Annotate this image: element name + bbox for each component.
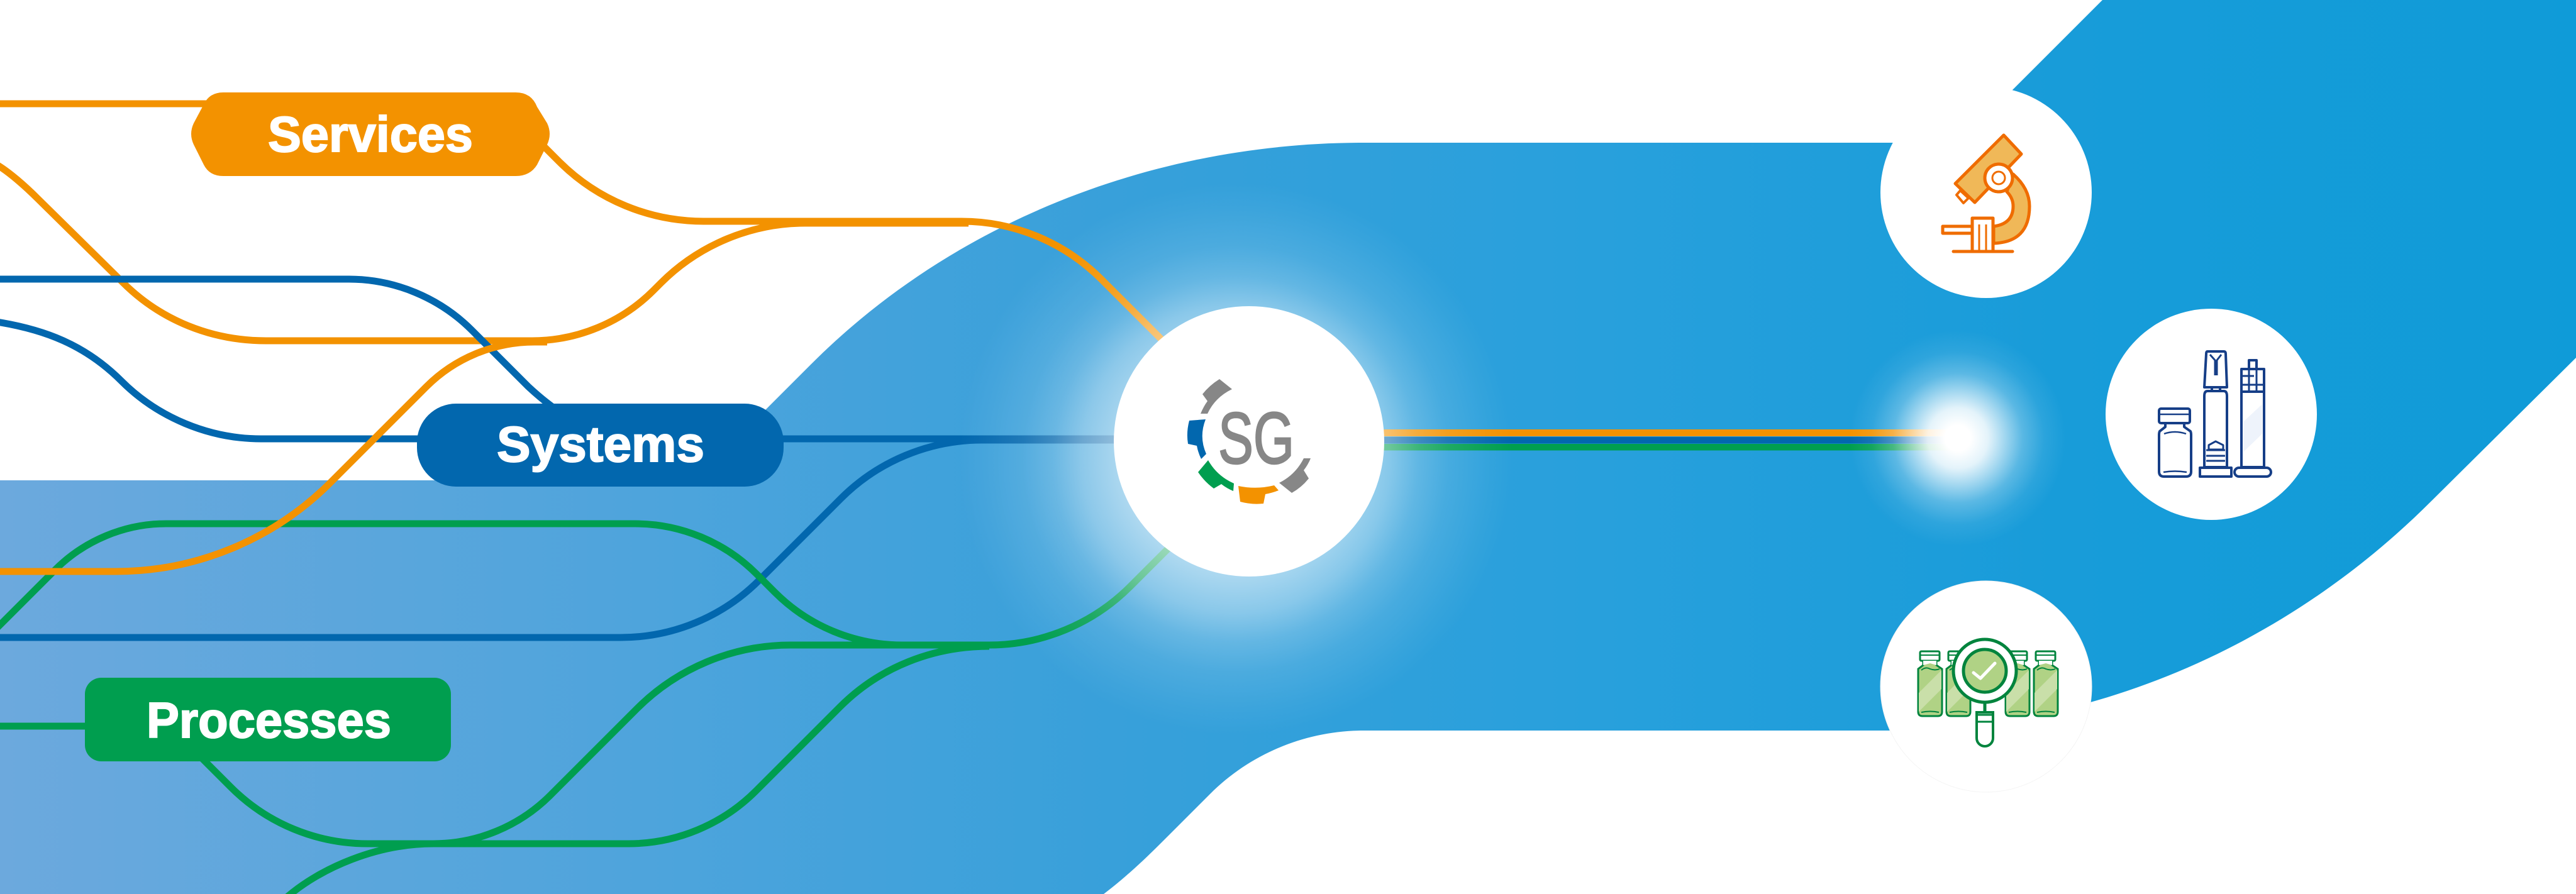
line: orange services lower xyxy=(0,165,969,341)
output line: blue xyxy=(1377,437,1952,444)
label: Services: Services xyxy=(268,106,473,162)
line: blue systems upper xyxy=(0,279,566,416)
logo gear: blue xyxy=(1187,419,1206,459)
output line: orange xyxy=(1377,429,1952,436)
icon: microscope xyxy=(1943,135,2029,251)
output lines xyxy=(1377,429,1952,450)
output circle: microscope xyxy=(1880,87,2092,298)
line: orange services bottom xyxy=(0,342,547,571)
logo text: SG xyxy=(1218,397,1294,479)
logo gear: gray bottom xyxy=(1279,458,1311,493)
logo gear: green xyxy=(1198,460,1234,491)
icon: row of green vials xyxy=(1918,651,2058,716)
output line: green xyxy=(1377,444,1952,450)
label: Processes: Processes xyxy=(147,692,391,748)
line: blue systems lower xyxy=(0,440,1132,637)
label: Processes xyxy=(85,678,451,761)
logo gear: orange xyxy=(1238,485,1279,504)
icon: vial xyxy=(2159,409,2191,477)
label: Services xyxy=(191,92,550,176)
output circle: vial inspection xyxy=(1880,581,2092,792)
logo gear: gray top xyxy=(1201,379,1232,414)
line: orange services top xyxy=(0,104,1170,348)
line: green processes lower xyxy=(286,645,906,894)
label: Systems xyxy=(417,404,784,487)
icon: syringe xyxy=(2235,360,2271,477)
icon: magnifying glass with check xyxy=(1953,639,2016,746)
label: Systems: Systems xyxy=(497,416,704,472)
icon: cartridge xyxy=(2200,351,2231,477)
line: blue systems middle xyxy=(0,322,1132,439)
line: green processes upper xyxy=(0,524,1182,645)
line: green processes middle xyxy=(189,646,989,844)
hub circle with SG logo xyxy=(1114,306,1384,577)
glow at end of output lines xyxy=(1850,330,2066,546)
line: green processes left stub xyxy=(0,723,126,729)
connector lines xyxy=(0,104,1182,894)
output circle: vial, cartridge and syringe xyxy=(2106,309,2317,520)
glow around hub xyxy=(959,182,1513,736)
